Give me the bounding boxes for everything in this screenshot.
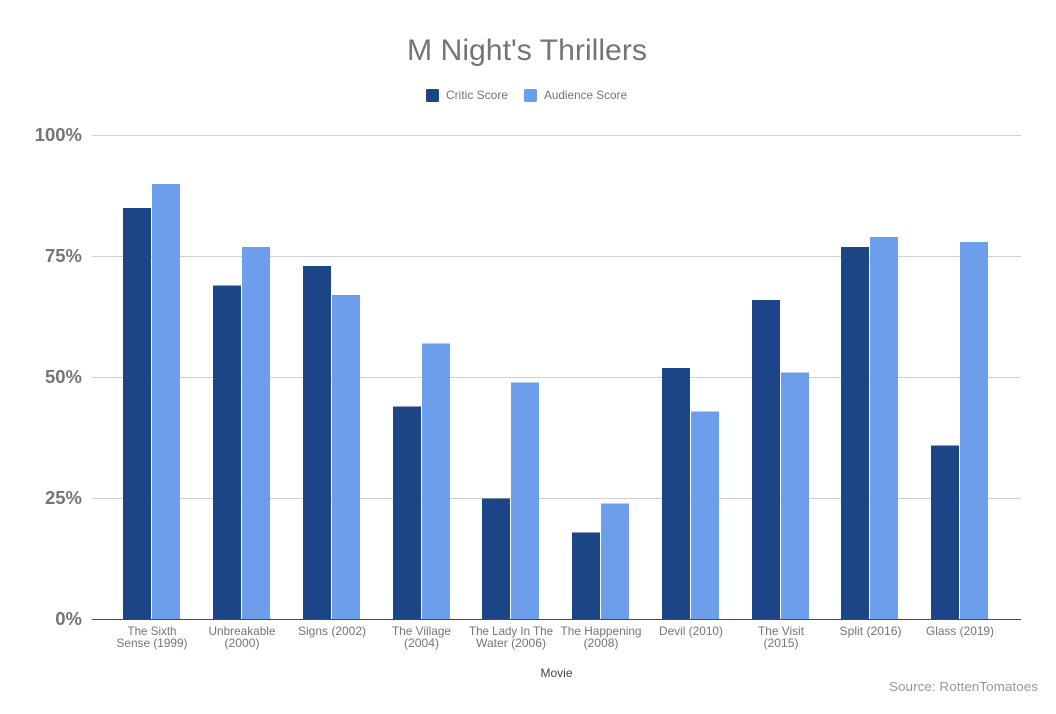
x-axis category labels: The Village — [392, 624, 451, 638]
gridlines — [92, 136, 1021, 498]
x-axis category labels: Signs (2002) — [298, 624, 366, 638]
y-axis labels: 75% — [45, 245, 82, 266]
y-axis labels: 100% — [35, 124, 82, 145]
x-axis category labels: Split (2016) — [840, 624, 902, 638]
critic score bars — [123, 208, 959, 620]
y-axis labels: 0% — [55, 608, 82, 629]
audience score bars — [152, 184, 988, 620]
x-axis category labels: The Visit — [758, 624, 805, 638]
x-axis category labels: Unbreakable — [208, 624, 276, 638]
x-axis category labels: (2015) — [764, 636, 799, 650]
source note: Source: RottenTomatoes — [889, 679, 1039, 694]
x-axis category labels: Water (2006) — [476, 636, 546, 650]
x-axis category labels: (2004) — [404, 636, 439, 650]
x-axis category labels — [116, 624, 994, 650]
x-axis baseline — [92, 618, 1021, 620]
x-axis category labels: The Lady In The — [469, 624, 553, 638]
x-axis category labels: The Sixth — [128, 624, 176, 638]
x-axis category labels: (2008) — [584, 636, 619, 650]
legend — [426, 88, 627, 102]
legend: Critic Score — [446, 88, 508, 102]
y-axis labels: 25% — [45, 487, 82, 508]
title: M Night's Thrillers — [407, 34, 647, 67]
x-axis category labels: The Happening — [560, 624, 642, 638]
x-axis category labels: Devil (2010) — [659, 624, 723, 638]
y-axis labels: 50% — [45, 366, 82, 387]
legend: Audience Score — [544, 88, 627, 102]
y-axis labels — [35, 124, 82, 629]
x-axis category labels: (2000) — [224, 636, 260, 650]
x-axis category labels: Sense (1999) — [116, 636, 188, 650]
x-axis title: Movie — [540, 666, 573, 680]
x-axis category labels: Glass (2019) — [926, 624, 994, 638]
